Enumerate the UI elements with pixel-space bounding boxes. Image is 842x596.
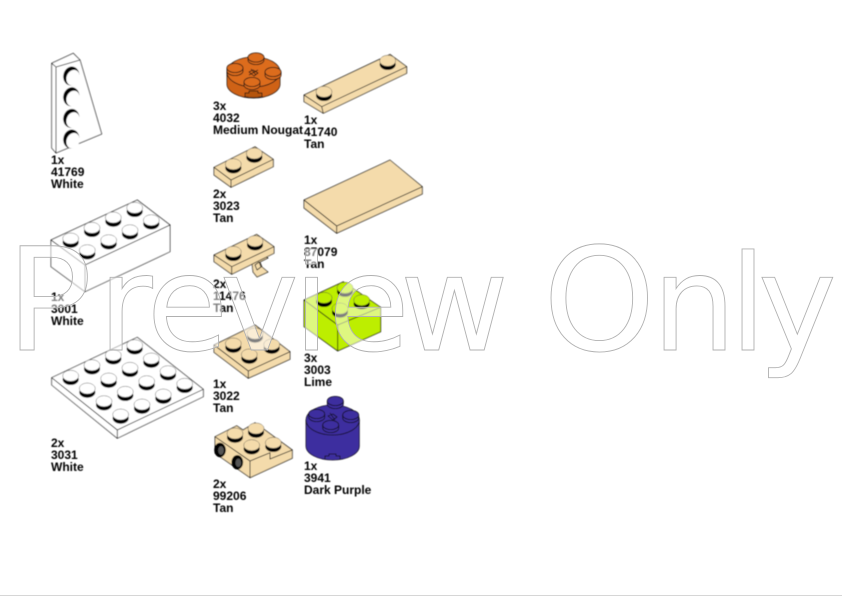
icon: bracket plate xyxy=(214,423,292,478)
parts list xyxy=(51,53,422,515)
icon: 2x2 brick xyxy=(304,282,381,351)
label: 3031: 3031 xyxy=(51,448,78,462)
label: 99206: 99206 xyxy=(213,489,247,503)
label: 3003: Lime xyxy=(304,375,332,389)
label: 3003: 3x xyxy=(304,351,318,365)
label: 3941: Dark Purple xyxy=(304,483,372,497)
label: 4032: 3x xyxy=(213,99,227,113)
label: 3003: 3003 xyxy=(304,363,331,377)
label: 41740: 1x xyxy=(304,113,318,127)
icon: round plate xyxy=(227,53,281,98)
part: 3001 brick white xyxy=(51,200,170,328)
label: 87079: 1x xyxy=(304,233,318,247)
part: 41740 plate tan xyxy=(304,54,407,151)
label: 41769: 1x xyxy=(51,153,65,167)
label: 3941: 3941 xyxy=(304,471,331,485)
part: 4032 round plate medium nougat xyxy=(213,53,303,137)
icon: wedge plate xyxy=(52,53,102,153)
part: 87079 tile tan xyxy=(304,160,422,271)
label: 3941: 1x xyxy=(304,459,318,473)
icon: plate with clip xyxy=(214,234,274,277)
label: 11476: 11476 xyxy=(213,289,246,303)
label: 87079: 87079 xyxy=(304,245,338,259)
part: 11476 plate with clip tan xyxy=(213,234,274,315)
label: 41769: White xyxy=(51,177,84,191)
part: 99206 plate with side studs tan xyxy=(213,423,292,515)
watermark: Preview Only: O xyxy=(543,217,656,384)
label: 3022: 1x xyxy=(213,377,227,391)
watermark: Preview Only: nly xyxy=(652,228,837,382)
watermark: Preview Only: P xyxy=(6,217,92,384)
part: 41769 wedge plate white xyxy=(51,53,102,191)
part: 3941 round brick dark purple xyxy=(304,396,372,497)
label: 3022: Tan xyxy=(213,401,233,415)
label: 3001: 3001 xyxy=(51,302,78,316)
icon: 2x2 plate xyxy=(214,325,290,378)
part: 3003 brick lime xyxy=(304,282,381,389)
part: 3031 plate white xyxy=(51,337,203,474)
label: 4032: Medium Nougat xyxy=(213,123,303,137)
icon: 1x2 plate xyxy=(214,147,273,187)
label: 3001: White xyxy=(51,314,84,328)
footer rule xyxy=(0,595,842,596)
label: 11476: Tan xyxy=(213,301,233,315)
icon: 1x4 plate xyxy=(304,54,407,113)
label: 41740: Tan xyxy=(304,137,324,151)
label: 41769: 41769 xyxy=(51,165,85,179)
icon: 4x4 plate xyxy=(52,337,203,438)
label: 3031: 2x xyxy=(51,436,65,450)
icon: 2x4 brick xyxy=(51,200,170,292)
label: 3031: White xyxy=(51,460,84,474)
label: 41740: 41740 xyxy=(304,125,338,139)
label: 99206: 2x xyxy=(213,477,227,491)
label: 3023: Tan xyxy=(213,211,233,225)
label: 3023: 3023 xyxy=(213,199,240,213)
icon: 2x4 tile xyxy=(304,160,422,233)
label: 87079: Tan xyxy=(304,257,324,271)
label: 11476: 2x xyxy=(213,277,227,291)
part: 3023 plate tan xyxy=(213,147,273,225)
label: 4032: 4032 xyxy=(213,111,240,125)
icon: round brick xyxy=(306,396,359,460)
label: 3022: 3022 xyxy=(213,389,240,403)
label: 99206: Tan xyxy=(213,501,233,515)
watermark: Preview Only: review xyxy=(98,228,509,382)
label: 3001: 1x xyxy=(51,290,65,304)
part: 3022 plate tan xyxy=(213,325,290,415)
label: 3023: 2x xyxy=(213,187,227,201)
